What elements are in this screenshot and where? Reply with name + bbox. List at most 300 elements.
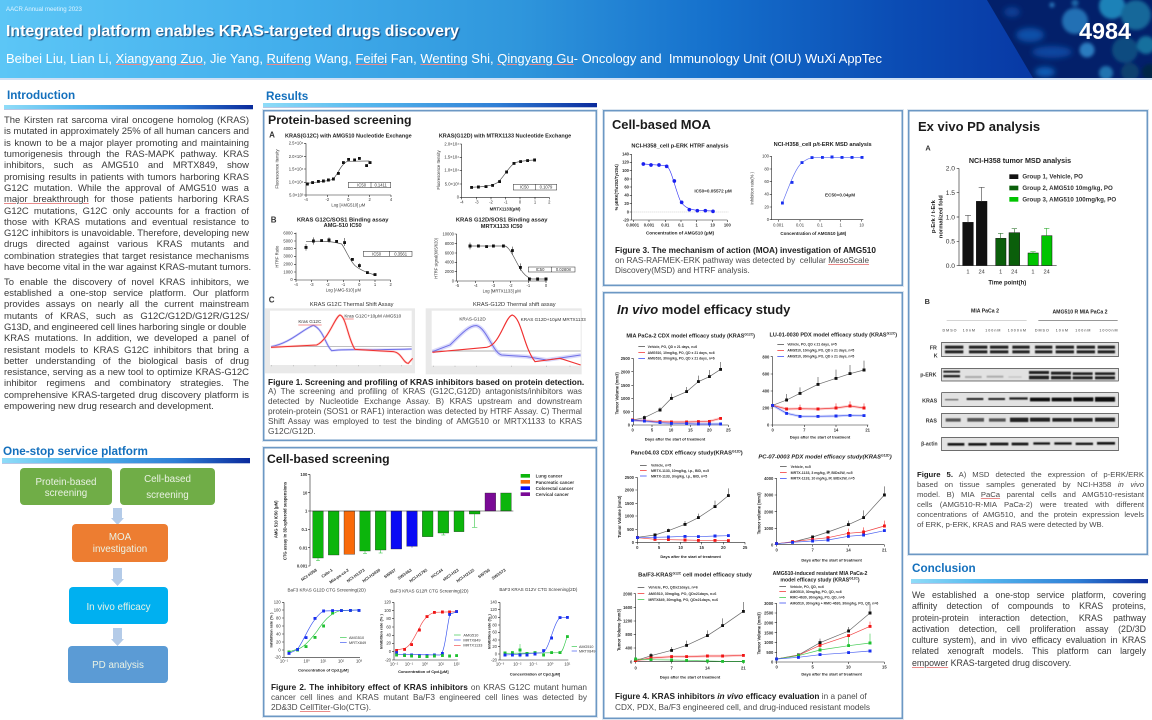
chart: PC-07-0003 PDX: 3000: [764, 493, 774, 498]
bar chart: NCI-H358 MSD: 24: [1044, 270, 1050, 276]
title: Integrated platform enables KRAS-targeted drugs discovery: [6, 23, 459, 40]
poster number: 4984: [1079, 18, 1131, 44]
caption: figure 5: concentrations of AMG510, and the protein expression levels: [917, 510, 1144, 519]
bar chart: AMG510 IC50 per cell line: 10: [303, 490, 308, 495]
western blot: B: [925, 297, 930, 306]
chart: p-ERK HTRF: IC50=0.05572 μM: [694, 189, 732, 194]
chart: BaF3 G12R: 10⁻²: [390, 661, 399, 666]
chart: B right KRAS G12D SOS1 binding: KRAS G12D/SOS1 Binding assay: [456, 218, 548, 224]
chart: B left KRAS G12C SOS1 binding: B: [271, 216, 277, 225]
chart: B left KRAS G12C SOS1 binding: IC50: [372, 251, 382, 256]
chart: A right KRAS G12D nucleotide exchange: Fluorescence Itensity: [436, 149, 441, 190]
bar chart: AMG510 IC50 per cell line: 0.1: [302, 527, 308, 532]
charts: ex vivo: [920, 143, 1119, 451]
chart: BaF3 G12V: 120: [490, 607, 498, 612]
chart: BaF3 G12V: 20: [492, 644, 498, 649]
chart: AMG510-induced resistant MIA PaCa-2: 15: [882, 664, 887, 669]
chart: Ba/F3-KRAS G12C: 0: [635, 665, 638, 670]
chart: PC-07-0003 PDX: MRTX-1133, 10 mg/kg, IP, BIDx2W, n=5: [791, 477, 855, 481]
chart: B right KRAS G12D SOS1 binding: -4: [474, 283, 478, 288]
chart: B right KRAS G12D SOS1 binding: 0.02808: [556, 267, 572, 272]
box: cell-based screening: screening: [146, 490, 189, 501]
chart: p/t-ERK MSD: 0.1: [817, 222, 824, 227]
chart: LU-01-0030 PDX: 400: [762, 389, 770, 394]
chart: BaF3 G12V: 0: [495, 651, 498, 656]
legend: cancer types: Cervical cancer: [536, 492, 569, 497]
chart: A right KRAS G12D nucleotide exchange: -2: [489, 199, 494, 204]
western blot: RAS: [926, 418, 937, 424]
chart: Ba/F3-KRAS G12C: 0: [630, 659, 633, 664]
chart: C left KRAS G12C thermal shift: C: [269, 295, 275, 304]
panel: in vivo model efficacy study: [603, 292, 903, 719]
chart: Panc04.03 CDX: 25: [743, 545, 748, 550]
chart: AMG510-induced resistant MIA PaCa-2: [756, 571, 887, 677]
heading: introduction: Introduction: [7, 89, 75, 102]
text block: conclusion: We established a one-stop service platform, covering: [912, 590, 1146, 600]
chart: MIA PaCa-2 CDX: AMG510, 10mg/kg, PO, QD x 21 days, n=6: [648, 351, 715, 355]
chart: BaF3 G12D: 10²: [338, 659, 345, 664]
text block: introduction: tumorigenesis through the RAS-MAPK pathway. KRAS: [4, 149, 249, 160]
chart: AMG510-induced resistant MIA PaCa-2: 5: [812, 664, 815, 669]
chart: p-ERK HTRF: 0.01: [661, 222, 670, 227]
western blot: MIA PaCa 2: [971, 308, 999, 314]
chart: MIA PaCa-2 CDX: 2000: [621, 369, 631, 374]
bar chart: NCI-H358 MSD: 0.5: [946, 239, 955, 246]
chart: Ba/F3-KRAS G12C: Days after the start of treatment: [660, 675, 721, 680]
chart: C left KRAS G12C thermal shift: [265, 295, 415, 373]
text block: introduction: combination strategies that target resistance mechanisms: [4, 251, 249, 262]
chart: LU-01-0030 PDX: G12C: [887, 332, 896, 336]
text block: conclusion: related xenograft models. This platform can largely: [912, 646, 1146, 656]
chart: AMG510-induced resistant MIA PaCa-2: 0: [776, 664, 779, 669]
chart: BaF3 G12V: Concentration of Cpd.[μM]: [510, 672, 561, 677]
chart: BaF3 G12D: [269, 588, 366, 672]
text block: conclusion: culture system), and in vivo efficacy evaluation in KRAS: [912, 635, 1146, 645]
chart: A left KRAS G12C nucleotide exchange: -4: [304, 197, 309, 202]
bar chart: AMG510 IC50 per cell line: 0.01: [299, 545, 308, 550]
heading: ex vivo PD analysis: Ex vivo PD analysis: [918, 119, 1040, 134]
legend: cancer types: Lung cancer: [536, 474, 563, 479]
chart: Panc04.03 CDX: MRTX-1133, 3mg/kg, i.p., BID, n=5: [651, 474, 707, 478]
chart: p/t-ERK MSD: 60: [764, 179, 770, 184]
chart: PC-07-0003 PDX: 0: [771, 542, 774, 547]
chart: LU-01-0030 PDX: [762, 332, 897, 440]
text block: introduction: inhibitor regimens and combinatory strategies. The: [4, 378, 249, 389]
chart: A right KRAS G12D nucleotide exchange: 1.0×10⁴: [444, 168, 459, 173]
chart: B right KRAS G12D SOS1 binding: 0: [452, 278, 455, 283]
legend: cancer types: Pancreatic cancer: [536, 480, 574, 485]
chart: A left KRAS G12C nucleotide exchange: 4: [390, 197, 393, 202]
caption: figure 3: Figure 3. The mechanism of action (MOA) investigation of AMG510: [615, 246, 876, 255]
chart: LU-01-0030 PDX: 0: [767, 423, 770, 428]
western blot: β-actin: [921, 442, 938, 448]
bar chart: NCI-H358 MSD: 2.0: [946, 166, 955, 173]
chart: Ba/F3-KRAS G12C: 1200: [623, 619, 633, 624]
chart: BaF3 G12R: BaF3 KRAS G12R CTG Screening(2D): [390, 588, 469, 593]
legend: cancer types: Colorectal cancer: [536, 486, 574, 491]
chart: B left KRAS G12C SOS1 binding: AMG-510 IC50: [324, 223, 362, 229]
legend: treatment groups: Group 2, AMG510 10mg/kg, PO: [1022, 185, 1113, 192]
chart: A right KRAS G12D nucleotide exchange: -3: [475, 199, 479, 204]
text block: introduction: better understanding of the biological basis of drug: [4, 356, 249, 367]
chart: LU-01-0030 PDX: 800: [762, 354, 770, 359]
chart: AMG510-induced resistant MIA PaCa-2: 0: [771, 660, 774, 665]
text block: conclusion: [912, 590, 1146, 668]
chart: B right KRAS G12D SOS1 binding: 10000: [442, 231, 455, 236]
chart: BaF3 G12R: 40: [386, 633, 392, 638]
caption: figure 3: Discovery(MSD) and HTRF analysis.: [615, 266, 750, 275]
chart: BaF3 G12R: 80: [386, 616, 392, 621]
bar chart: NCI-H358 MSD: Time point(h): [988, 281, 1026, 287]
chart: Ba/F3-KRAS G12C: 14: [705, 665, 710, 670]
chart: B right KRAS G12D SOS1 binding: MRTX1133 IC50: [481, 224, 523, 230]
chart: A right KRAS G12D nucleotide exchange: -1: [504, 199, 508, 204]
chart: LU-01-0030 PDX: 0: [772, 428, 775, 433]
chart: B left KRAS G12C SOS1 binding: 2: [390, 282, 393, 287]
text block: conclusion: affinity detection of compounds to KRAS proteins,: [912, 601, 1146, 611]
chart: MIA PaCa-2 CDX: 0: [628, 423, 631, 428]
text block: introduction: To enable the discovery of novel KRAS inhibitors, we: [4, 277, 249, 288]
chart: B left KRAS G12C SOS1 binding: -1: [341, 282, 346, 287]
chart: p-ERK HTRF: 10: [710, 222, 716, 227]
chart: B left KRAS G12C SOS1 binding: -2: [326, 282, 330, 287]
chart: B right KRAS G12D SOS1 binding: Log [MRTX1133] μM: [483, 288, 521, 293]
text block: introduction: [4, 115, 251, 412]
chart: PC-07-0003 PDX: Vehicle, n=5: [791, 465, 811, 469]
chart: A right KRAS G12D nucleotide exchange: 0: [457, 195, 460, 200]
chart: Panc04.03 CDX: 5: [658, 545, 661, 550]
chart: A right KRAS G12D nucleotide exchange: 5.0×10³: [445, 181, 460, 186]
chart: A left KRAS G12C nucleotide exchange: 2.0×10⁴: [289, 154, 304, 159]
header banner: [0, 0, 1152, 80]
chart: B right KRAS G12D SOS1 binding: 2000: [445, 269, 455, 274]
chart: LU-01-0030 PDX: 7: [803, 428, 806, 433]
western blot: KRAS: [922, 398, 938, 404]
chart: C right KRAS G12D thermal shift: KRAS-G12D: [459, 317, 486, 322]
text block: introduction: comprehensive KRAS-targeted drug discovery platform is: [4, 390, 249, 401]
chart: p-ERK HTRF: 20: [624, 201, 630, 206]
chart: A right KRAS G12D nucleotide exchange: 1: [534, 199, 537, 204]
chart: B left KRAS G12C SOS1 binding: -4: [294, 282, 299, 287]
bar chart: AMG510 IC50 per cell line: CTG assay in 3D-spheroid suspensions: [282, 481, 287, 560]
chart: p-ERK HTRF: 40: [624, 193, 630, 198]
chart: LU-01-0030 PDX: ): [895, 333, 897, 339]
text block: introduction: inhibitors, such as AMG510 and MRTX849, show: [4, 160, 249, 171]
chart: Panc04.03 CDX: 2500: [625, 475, 635, 480]
chart: AMG510-induced resistant MIA PaCa-2: 2000: [764, 620, 774, 625]
chart: p-ERK HTRF: 80: [624, 176, 630, 181]
chart: BaF3 G12R: Concentration of Cpd.[μM]: [398, 669, 449, 674]
text block: introduction: G13D, and engineered cell lines harboring single or double: [4, 322, 246, 333]
chart: p/t-ERK MSD: Concentration of AMG510 (μM): [780, 231, 847, 236]
chart: BaF3 G12V: AMG510: [579, 645, 593, 649]
chart: BaF3 G12R: -20: [385, 657, 392, 662]
chart: MIA PaCa-2 CDX: G12C: [744, 333, 754, 337]
chart: BaF3 G12D: 60: [276, 623, 281, 628]
chart: A left KRAS G12C nucleotide exchange: 1.0×10⁴: [289, 180, 304, 185]
chart: PC-07-0003 PDX: PC-07-0003 PDX model efficacy study(KRAS: [758, 454, 881, 460]
text block: introduction: those with KRAS mutations and eventual resistance to: [4, 217, 249, 228]
chart: A left KRAS G12C nucleotide exchange: A: [269, 130, 275, 139]
chart: AMG510-induced resistant MIA PaCa-2: AMG510-induced resistant MIA PaCa-2: [773, 571, 867, 577]
chart: MIA PaCa-2 CDX: 1500: [621, 383, 631, 388]
chart: LU-01-0030 PDX: 14: [834, 428, 839, 433]
chart: Panc04.03 CDX: ): [741, 451, 743, 457]
box: MOA investigation: [72, 524, 168, 562]
box: in vivo efficacy: In vivo efficacy: [86, 602, 151, 613]
charts: in vivo efficacy: [615, 332, 897, 680]
chart: AMG510-induced resistant MIA PaCa-2: AMG510, 30mg/kg + RMC-4630, 30mg/kg, PO, QD, n=6: [790, 601, 878, 605]
chart: Panc04.03 CDX: 10: [678, 545, 684, 550]
caption: figure 3: on RAS-RAFMEK-ERK pathway was detected by cellular MesoScale: [615, 256, 869, 265]
chart: Ba/F3-KRAS G12C: cell model efficacy study: [681, 573, 753, 579]
bar chart: AMG510 IC50 per cell line: SW1463: [397, 567, 413, 581]
chart: BaF3 G12V: MRTX849: [579, 649, 595, 653]
western blot: K: [934, 354, 938, 360]
chart: BaF3 G12D: 40: [276, 631, 281, 636]
chart: AMG510-induced resistant MIA PaCa-2: RMC-4630, 30mg/kg, PO, QD, n=6: [790, 596, 845, 600]
bar chart: AMG510 IC50 per cell line: NCI-H2122: [455, 567, 476, 583]
chart: B left KRAS G12C SOS1 binding: 1000: [283, 269, 293, 274]
caption: figure 2: cancer cell lines and KRAS mutant Ba/F3 engineered cell lines was detected by: [271, 693, 587, 702]
bar chart: AMG510 IC50 per cell line: SW756: [477, 567, 491, 579]
bar chart: NCI-H358 MSD: A: [925, 143, 931, 152]
caption: figure 4: Figure 4. KRAS inhibitors in vivo efficacy evaluation in a panel of: [615, 692, 867, 701]
chart: MIA PaCa-2 CDX: 500: [623, 409, 631, 414]
chart: Ba/F3-KRAS G12C: 400: [625, 646, 633, 651]
chart: PC-07-0003 PDX: [756, 453, 892, 562]
chart: B left KRAS G12C SOS1 binding: Log [AMG-510] μM: [326, 287, 361, 292]
chart: BaF3 G12R: 60: [386, 624, 392, 629]
chart: A left KRAS G12C nucleotide exchange: 0: [347, 197, 350, 202]
chart: AMG510-induced resistant MIA PaCa-2: Tumor Volume (mm3): [756, 612, 761, 654]
chart: p/t-ERK MSD: 1: [840, 222, 843, 227]
chart: p-ERK HTRF: -20: [623, 217, 630, 222]
chart: LU-01-0030 PDX: Vehicle, PO, QD x 21 days, n=5: [787, 343, 837, 347]
bar chart: NCI-H358 MSD: 1.0: [946, 214, 955, 221]
box: protein-based screening: Protein-based: [36, 477, 96, 488]
bar chart: AMG510 IC50 per cell line: SW837: [383, 567, 397, 579]
chart: p/t-ERK MSD: [750, 142, 872, 236]
chart: MIA PaCa-2 CDX: Tumor Volume (mm3): [615, 372, 620, 414]
chart: Ba/F3-KRAS G12C: 800: [625, 632, 633, 637]
chart: C right KRAS G12D thermal shift: [426, 302, 586, 374]
bar chart: AMG510 IC50 per cell line: NCI-H358: [300, 567, 318, 582]
chart: A right KRAS G12D nucleotide exchange: 0: [519, 199, 522, 204]
panel: ex vivo PD analysis: [908, 110, 1148, 555]
chart: PC-07-0003 PDX: Tumor volume (mm3): [756, 492, 761, 534]
chart: MIA PaCa-2 CDX: 1000: [621, 396, 631, 401]
chart: LU-01-0030 PDX: LU-01-0030 PDX model efficacy study (KRAS: [770, 333, 887, 339]
chart: BaF3 G12V: 10⁻³: [496, 661, 505, 666]
chart: PC-07-0003 PDX: 4000: [764, 476, 774, 481]
chart: MIA PaCa-2 CDX: MIA PaCa-2 CDX model efficacy study (KRAS: [626, 334, 744, 340]
chart: LU-01-0030 PDX: 200: [762, 406, 770, 411]
bar chart: NCI-H358 MSD: [925, 143, 1116, 287]
chart: C left KRAS G12C thermal shift: Kras G12C: [298, 319, 322, 324]
box: MOA investigation: MOA: [109, 532, 131, 543]
chart: BaF3 G12R: 10²: [454, 661, 460, 666]
chart: A right KRAS G12D nucleotide exchange: MRTX1133(μM): [490, 206, 521, 211]
chart: BaF3 G12R: 100: [384, 608, 392, 613]
box: in vivo efficacy: [69, 587, 168, 624]
chart: BaF3 G12D: -20: [275, 655, 281, 660]
chart: A right KRAS G12D nucleotide exchange: 1.5×10⁴: [444, 155, 459, 160]
charts: MOA: [614, 142, 872, 236]
chart: B right KRAS G12D SOS1 binding: -1: [526, 283, 531, 288]
text block: introduction: drugs directed against various KRAS mutants and: [4, 239, 249, 250]
western blot: 10nM: [963, 328, 976, 332]
chart: BaF3 G12R: 10⁰: [422, 661, 428, 666]
caption: figure 5: Figure 5. A) MSD detected the expression of p-ERK/ERK: [917, 470, 1144, 479]
box: cell-based screening: [120, 468, 215, 505]
bar chart: NCI-H358 MSD: 0.0: [946, 263, 955, 270]
western blot: FR: [930, 346, 937, 352]
chart: p-ERK HTRF: 140: [622, 152, 630, 157]
chart: p-ERK HTRF: 0.001: [644, 222, 655, 227]
charts: protein assays: [265, 130, 586, 374]
box: protein-based screening: [20, 468, 112, 505]
chart: BaF3 G12D: 10⁻¹: [280, 659, 289, 664]
chart: Panc04.03 CDX: Tumor Volume (mm3): [617, 495, 622, 538]
bar chart: AMG510 IC50 per cell line: Calu-1: [320, 567, 334, 579]
bar chart: AMG510 IC50 per cell line: Mia-pa-ca-2: [328, 567, 350, 585]
text block: introduction: is mutated in approximately 25% of all human cancers and: [4, 126, 249, 137]
legend: treatment groups: Group 1, Vehicle, PO: [1022, 174, 1083, 181]
western blot: 1000nM: [1099, 328, 1119, 332]
chart: B right KRAS G12D SOS1 binding: -2: [509, 283, 513, 288]
chart: BaF3 G12R: 120: [384, 600, 392, 605]
chart: BaF3 G12V: 10⁰: [547, 661, 554, 666]
text block: introduction: established a one-stop service platform. Our platform: [4, 288, 249, 299]
chart: p-ERK HTRF: 100: [622, 168, 630, 173]
chart: MIA PaCa-2 CDX: AMG510, 30mg/kg, PO, QD x 21 days, n=6: [648, 357, 715, 361]
chart: BaF3 G12V: [486, 587, 595, 677]
chart: BaF3 G12D: 10³: [356, 659, 363, 664]
chart: A right KRAS G12D nucleotide exchange: IC50: [520, 185, 529, 190]
chart: BaF3 G12R: Inhibition rate (% ): [379, 614, 384, 649]
chart: p/t-ERK MSD: 40: [764, 192, 770, 197]
chart: C left KRAS G12C thermal shift: KRAS G12C Thermal Shift Assay: [310, 302, 394, 308]
bar chart: AMG510 IC50 per cell line: NCI-H1373: [346, 567, 366, 583]
western blot: 1000nM: [1008, 328, 1027, 332]
western blot: DMSO: [943, 328, 957, 332]
chart: LU-01-0030 PDX: 21: [865, 428, 871, 433]
chart: p-ERK HTRF: 1: [696, 222, 699, 227]
chart: AMG510-induced resistant MIA PaCa-2: Days after the start of treatment: [801, 672, 863, 677]
chart: A right KRAS G12D nucleotide exchange: KRAS(G12D) with MTRX1133 Nucleotide Exchange: [439, 133, 571, 139]
chart: B left KRAS G12C SOS1 binding: 3000: [283, 254, 293, 259]
bar chart: AMG510 IC50 per cell line: 100: [300, 472, 308, 477]
chart: p/t-ERK MSD: 0.01: [796, 222, 805, 227]
chart: AMG510-induced resistant MIA PaCa-2: 1000: [764, 640, 774, 645]
chart: A right KRAS G12D nucleotide exchange: [436, 133, 571, 211]
chart: Panc04.03 CDX: Days after the start of treatment: [660, 554, 722, 559]
bar chart: NCI-H358 MSD: 1: [966, 270, 970, 276]
text block: introduction: KRAS mutations. In addition, we developed a panel of: [4, 333, 249, 344]
bar chart: AMG510 IC50 per cell line: NCI-H1792: [408, 567, 429, 583]
chart: p-ERK HTRF: 0.1: [678, 222, 685, 227]
chart: BaF3 G12R: 10⁻¹: [405, 661, 414, 666]
chart: Panc04.03 CDX: 20: [721, 545, 726, 550]
chart: p/t-ERK MSD: EC50=0.04μM: [825, 193, 855, 198]
heading: one-stop service platform: One-stop service platform: [3, 445, 148, 458]
chart: p-ERK HTRF: Concentration of AMG510 (μM): [646, 230, 715, 235]
western blot: AMG510 R MIA PaCa 2: [1052, 309, 1108, 315]
chart: p/t-ERK MSD: 20: [764, 204, 770, 209]
bar chart: NCI-H358 MSD: 1: [1031, 270, 1035, 276]
chart: A left KRAS G12C nucleotide exchange: Fluorescence Itensity: [274, 148, 279, 189]
arrow: in vivo to PD: [111, 628, 124, 646]
caption: figure 1: G12C/G12D.: [268, 427, 316, 436]
bar chart: NCI-H358 MSD: 1.5: [946, 190, 955, 197]
bar chart: NCI-H358 MSD: 24: [979, 270, 985, 276]
header cell image: [987, 0, 1152, 78]
chart: Panc04.03 CDX: 0: [636, 545, 639, 550]
chart: A left KRAS G12C nucleotide exchange: IC50: [357, 183, 367, 188]
chart: BaF3 G12R: 10¹: [438, 661, 445, 666]
chart: PC-07-0003 PDX: Days after the start of treatment: [801, 557, 863, 562]
chart: AMG510-induced resistant MIA PaCa-2: Vehicle, PO, QD, n=6: [790, 585, 824, 589]
heading: cell-based MOA: Cell-based MOA: [612, 117, 711, 132]
chart: AMG510-induced resistant MIA PaCa-2: 2500: [764, 611, 774, 616]
chart: BaF3 G12D: 0: [278, 647, 281, 652]
chart: Ba/F3-KRAS G12C: 2000: [623, 591, 633, 596]
chart: LU-01-0030 PDX: AMG510, 10mg/kg, PO, QD x 21 days, n=5: [787, 349, 854, 353]
chart: MIA PaCa-2 CDX: 20: [707, 428, 712, 433]
chart: BaF3 G12D: Inhibition rate (% ): [269, 612, 274, 647]
chart: BaF3 G12D: 100: [274, 607, 281, 612]
caption: figure 1: A) The screening and profiling of KRAS (G12C,G12D) antagonists/inhibitors was: [268, 387, 582, 396]
chart: C right KRAS G12D thermal shift: KRAS G12D+10μM MRTX1133: [521, 317, 586, 322]
text block: introduction: G12C mutation. While the approval of AMG510 was a: [4, 183, 249, 194]
chart: BaF3 G12V: Inhibition rate (% ): [486, 614, 491, 649]
chart: p/t-ERK MSD: Inhibition rate(% ): [750, 171, 755, 205]
caption: figure 2: 2D&3D CellTiter-Glo(CTG).: [271, 703, 371, 712]
chart: PC-07-0003 PDX: 2000: [764, 509, 774, 514]
chart: BaF3 G12D: 80: [276, 615, 281, 620]
chart: PC-07-0003 PDX: 21: [882, 548, 887, 553]
chart: p-ERK HTRF: NCI-H358_cell p-ERK HTRF analysis: [631, 143, 729, 149]
chart: Panc04.03 CDX: MRTX-1133, 10mg/kg, i.p., BID, n=5: [651, 469, 709, 473]
legend: treatment groups: Group 3, AMG510 100mg/kg, PO: [1022, 196, 1116, 203]
chart: BaF3 G12V: 80: [492, 622, 498, 627]
chart: B left KRAS G12C SOS1 binding: 0: [290, 277, 293, 282]
chart: B left KRAS G12C SOS1 binding: [271, 216, 412, 292]
box: PD analysis: [68, 646, 168, 683]
text block: introduction: resistance, serving as a new tool to optimize KRAS-G12C: [4, 367, 249, 378]
chart: Ba/F3-KRAS G12C: Ba/F3-KRAS: [638, 573, 672, 579]
chart: MIA PaCa-2 CDX: Vehicle, PO, QD x 21 days, n=6: [648, 345, 697, 349]
chart: Ba/F3-KRAS G12C: 1600: [623, 605, 633, 610]
box: MOA investigation: investigation: [93, 544, 147, 555]
chart: BaF3 G12V: BaF3 KRAS G12V CTG Screening(2D): [499, 587, 578, 592]
chart: Panc04.03 CDX: G12D: [732, 450, 741, 454]
text block: introduction: resistant models to KRAS G12C inhibitors that bring a: [4, 345, 249, 356]
chart: BaF3 G12R: [379, 588, 482, 674]
chart: p/t-ERK MSD: 10: [859, 222, 865, 227]
caption: figure 5: [917, 470, 1144, 529]
chart: AMG510-induced resistant MIA PaCa-2: 10: [846, 664, 851, 669]
chart: Panc04.03 CDX: 15: [699, 545, 705, 550]
heading: cell-based screening: Cell-based screening: [267, 452, 390, 466]
chart: BaF3 G12V: 10⁻²: [513, 661, 522, 666]
chart: p/t-ERK MSD: 100: [762, 154, 770, 159]
chart: AMG510-induced resistant MIA PaCa-2: ): [858, 578, 860, 584]
chart: B left KRAS G12C SOS1 binding: 0: [358, 282, 361, 287]
chart: A left KRAS G12C nucleotide exchange: -2: [325, 197, 330, 202]
text block: conclusion: activation detection, cell proliferation assay (2D/3D: [912, 624, 1146, 634]
